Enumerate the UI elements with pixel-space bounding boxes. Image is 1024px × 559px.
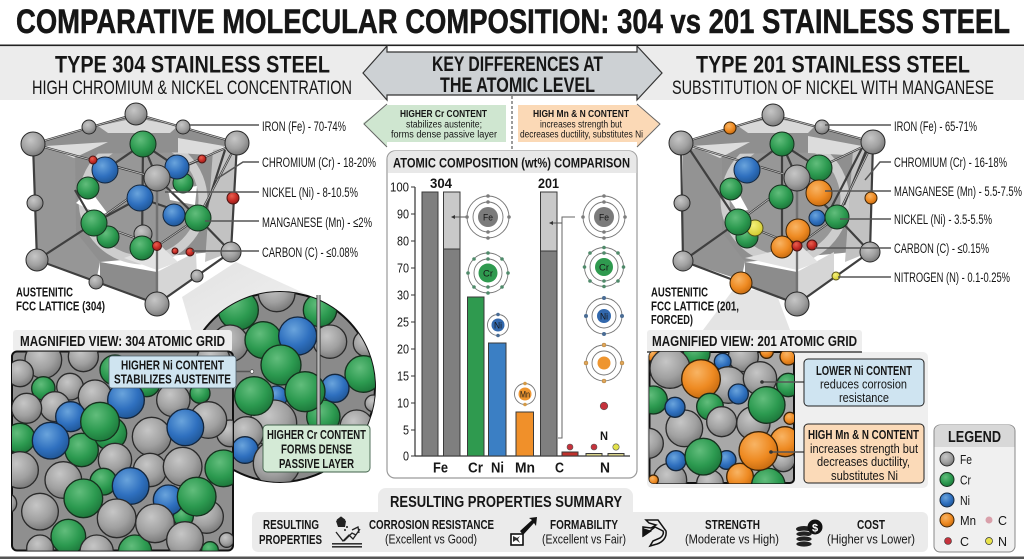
atom: Ni 304 [488, 313, 508, 337]
category labels: Fe [433, 460, 448, 476]
callout: high Mn and N content [518, 104, 660, 147]
text: formability: FORMABILITY [550, 518, 619, 532]
atom: Fe 304: Fe [483, 212, 493, 224]
labels: 304 composition: CARBON (C) - ≤0.08% [262, 245, 358, 260]
atom: Mn 304: Mn [520, 390, 530, 400]
text: formability: (Excellent vs Fair) [542, 532, 626, 546]
magnified tag 201 [647, 330, 862, 352]
callout: higher Cr content: HIGHER Cr CONTENT [400, 108, 487, 120]
atom: Mn 201 [584, 343, 624, 383]
y axis: 90 [397, 206, 409, 222]
category labels: C [555, 460, 564, 476]
icon: strength [643, 520, 666, 546]
lattice caption 304: AUSTENITIC [16, 286, 73, 300]
panel: atomic composition chart [387, 151, 637, 478]
atom: Ni 201 [584, 296, 624, 336]
y axis: 0 [403, 448, 409, 464]
header: type 201 [638, 46, 1024, 100]
atoms: carbon and nitrogen markers: N [600, 429, 608, 443]
legend: Ni [960, 493, 970, 508]
magnified tag 304 [13, 330, 232, 352]
y axis: 15 [397, 368, 409, 384]
text: corrosion resistance: CORROSION RESISTANCE [369, 518, 494, 532]
labels: 304 composition: NICKEL (Ni) - 8-10.5% [262, 185, 358, 200]
atom: Cr 304: Cr [483, 268, 493, 280]
text: cost [827, 518, 915, 546]
leader arrows [451, 215, 575, 438]
text: strength: STRENGTH [705, 518, 760, 532]
row label: RESULTING [263, 518, 319, 532]
category labels: N [600, 460, 610, 476]
icon: formability [511, 517, 537, 545]
legend: Mn [960, 513, 976, 528]
text: cost: (Higher vs Lower) [827, 532, 915, 546]
y axis: 80 [397, 234, 409, 248]
y axis: 70 [397, 260, 409, 276]
magnifier circle 304 [202, 291, 376, 483]
callout: higher Cr content: forms dense passive layer [391, 130, 498, 140]
chart heading [388, 151, 637, 173]
y axis: 25 [397, 314, 409, 330]
category labels: Cr [468, 460, 483, 476]
callout: lower Ni content [760, 359, 924, 406]
icon: cost [796, 520, 822, 547]
lattice caption 201: FORCED) [651, 313, 693, 327]
magnifier cone 304 [182, 262, 330, 345]
callout: higher Cr dense layer: FORMS DENSE [281, 442, 352, 456]
banner: key differences: KEY DIFFERENCES AT [432, 52, 603, 76]
legend: C [960, 534, 969, 549]
callout: high Mn and N [769, 424, 924, 483]
legend: Cr [960, 472, 972, 488]
atom: Cr 304 [466, 251, 510, 295]
text: strength [685, 518, 779, 546]
legend: C [998, 513, 1007, 528]
callout: high Mn and N: increases strength but [810, 441, 918, 456]
callout: higher Cr content: stabilizes austenite; [406, 120, 482, 130]
text: cost: COST [857, 518, 885, 532]
header: type 304: TYPE 304 STAINLESS STEEL [55, 52, 330, 78]
labels: 201 composition: IRON (Fe) - 65-71% [894, 119, 977, 134]
atom: Cr 201 [583, 246, 625, 288]
banner: key differences: THE ATOMIC LEVEL [440, 73, 595, 97]
row label: PROPERTIES [259, 533, 322, 547]
y axis: 10 [397, 396, 409, 410]
lattice: 201 [669, 104, 885, 316]
chart heading: ATOMIC COMPOSITION (wt%) COMPARISON [393, 156, 630, 170]
text: corrosion resistance [369, 518, 494, 546]
text: corrosion resistance: (Excellent vs Good) [385, 532, 477, 546]
y axis: 100 [390, 180, 409, 194]
lattice caption 201: AUSTENITIC [651, 286, 708, 300]
atom: Fe 304 [465, 194, 511, 240]
text: formability [542, 518, 626, 546]
atom: Mn 304 [514, 382, 536, 406]
callout: higher Ni content: HIGHER Ni CONTENT [121, 358, 224, 372]
atom: Fe 201 [581, 194, 627, 240]
magnified tag 201: MAGNIFIED VIEW: 201 ATOMIC GRID [652, 334, 857, 350]
atomic grid: 304 [11, 350, 234, 552]
atom: Ni 304: Ni [494, 320, 502, 330]
callout: higher Cr dense layer: PASSIVE LAYER [279, 456, 354, 471]
labels: 201 composition [815, 119, 1022, 285]
panel: magnified view 201 [647, 330, 928, 488]
legend: Fe [960, 452, 972, 467]
header: type 304: HIGH CHROMIUM & NICKEL CONCENTRATION [32, 78, 352, 99]
icon: corrosion resistance [332, 517, 362, 548]
legend: LEGEND [948, 429, 1001, 446]
atom: Fe 201: Fe [599, 212, 609, 224]
callout: higher Cr dense layer [263, 425, 370, 472]
magnifier cone 201 [703, 290, 790, 330]
callout: higher Ni content [109, 356, 254, 388]
y axis: 30 [397, 288, 409, 302]
panel: resulting properties summary [252, 488, 928, 552]
labels: 304 composition: CHROMIUM (Cr) - 18-20% [262, 155, 376, 170]
callout: high Mn and N content: increases strength but [540, 120, 622, 130]
callout: higher Cr content [363, 104, 506, 147]
callout: high Mn and N: substitutes Ni [831, 468, 898, 483]
callout: high Mn and N: HIGH Mn & N CONTENT [808, 427, 919, 442]
lattice caption 304: FCC LATTICE (304) [16, 300, 105, 314]
lattice: 304 [21, 103, 249, 316]
header: type 304 [0, 44, 1024, 100]
atoms: carbon and nitrogen markers [567, 402, 619, 450]
category labels: Mn [515, 460, 535, 476]
callout: higher Cr dense layer: HIGHER Cr CONTENT [267, 427, 366, 442]
atomic grid: 201 [648, 351, 795, 484]
labels: 304 composition: IRON (Fe) - 70-74% [262, 119, 346, 134]
icon: cost: $ [812, 522, 818, 534]
category labels: Ni [491, 460, 504, 476]
atom: Ni 201: Ni [600, 312, 608, 322]
lattice caption 304 [16, 286, 105, 314]
text: strength: (Moderate vs High) [685, 532, 779, 546]
category labels [433, 460, 610, 476]
atom: Cr 201: Cr [599, 262, 609, 274]
series labels: 304 [430, 175, 452, 191]
callout: high Mn and N: decreases ductility, [817, 454, 910, 469]
lattice caption 201 [651, 286, 739, 327]
callout: lower Ni content: resistance [839, 390, 889, 405]
row label [259, 518, 322, 547]
callout: lower Ni content: reduces corrosion [820, 376, 907, 392]
summary heading: RESULTING PROPERTIES SUMMARY [390, 494, 622, 511]
callout: lower Ni content: LOWER Ni CONTENT [816, 363, 912, 378]
header: type 201: TYPE 201 STAINLESS STEEL [696, 52, 970, 78]
y axis: 20 [397, 342, 409, 356]
callout: high Mn and N content: HIGH Mn & N CONTENT [533, 108, 629, 120]
y axis: 5 [403, 422, 409, 438]
magnified tag 304: MAGNIFIED VIEW: 304 ATOMIC GRID [20, 334, 225, 350]
labels: 304 composition: MANGANESE (Mn) - ≤2% [262, 215, 372, 230]
banner: key differences [363, 46, 662, 100]
callout: higher Ni content: STABILIZES AUSTENITE [114, 372, 231, 386]
series labels: 201 [538, 175, 559, 191]
series labels [430, 175, 559, 191]
bars [422, 192, 624, 456]
lattice caption 201: FCC LATTICE (201, [651, 300, 739, 314]
labels: 304 composition [165, 119, 376, 260]
y axis [390, 180, 630, 464]
leader: Cr callout [316, 295, 320, 426]
legend: N [998, 534, 1007, 549]
legend [934, 425, 1015, 552]
callout: high Mn and N content: decreases ductility, substitutes Ni [520, 130, 643, 140]
